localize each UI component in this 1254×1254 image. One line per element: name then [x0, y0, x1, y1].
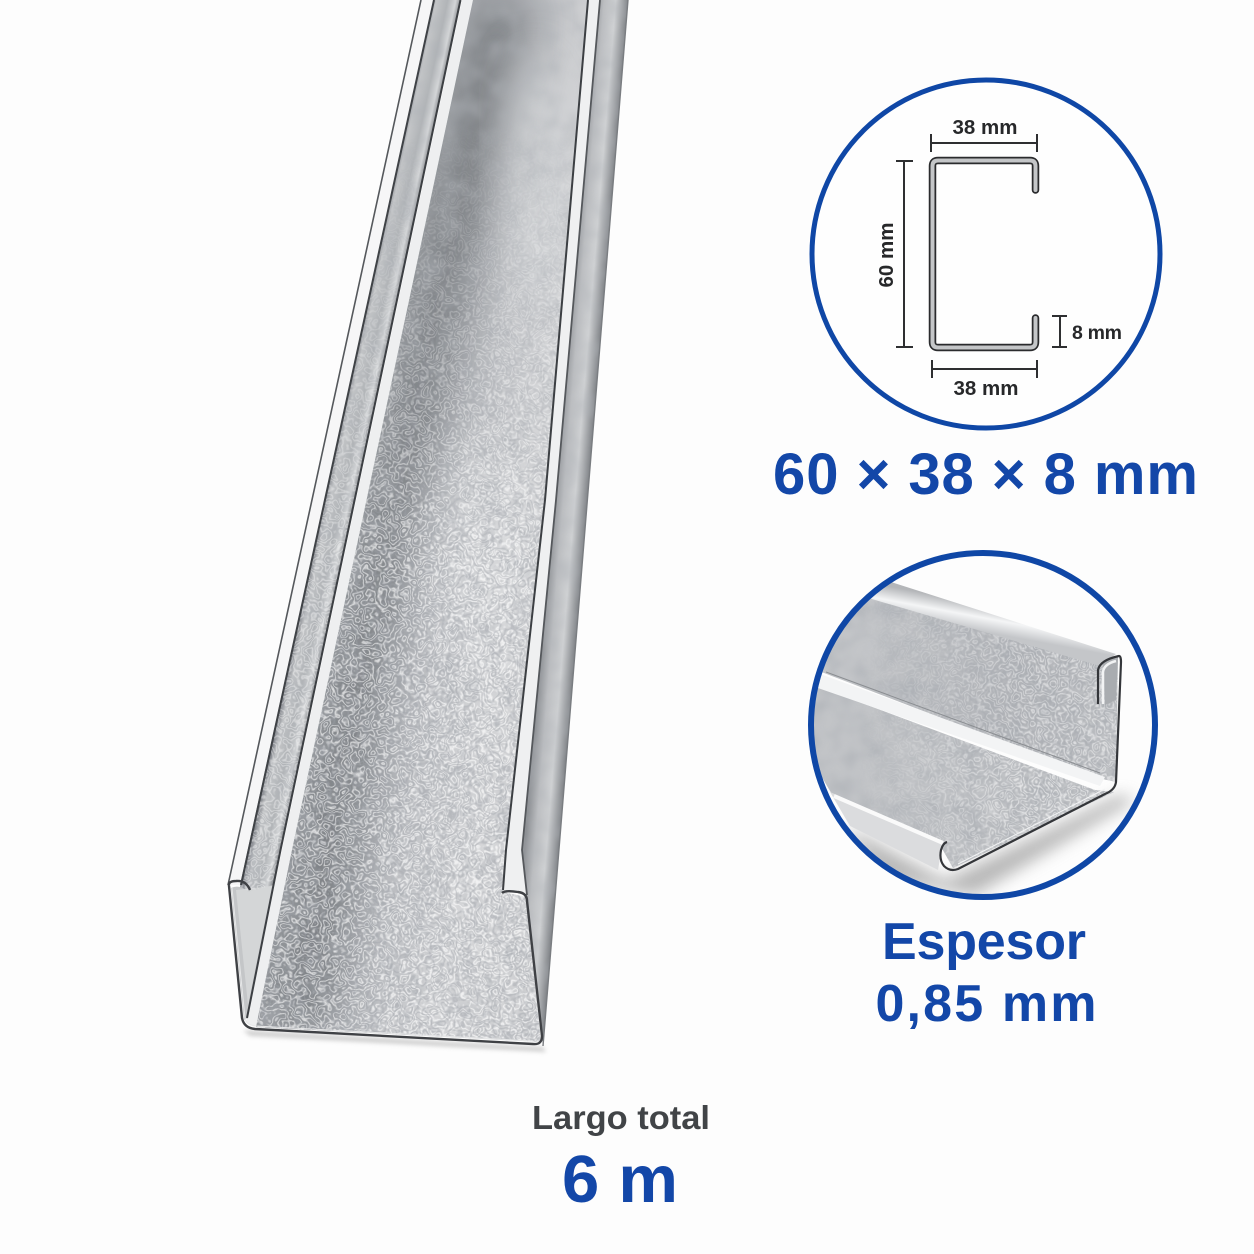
infographic canvas — [227, 0, 1194, 1202]
right outer face — [522, 0, 628, 1046]
length value: 6 m — [562, 1142, 678, 1217]
shadow — [845, 795, 1135, 895]
left wall — [240, 0, 460, 1018]
dimension: bottom width: 38 mm — [954, 377, 1018, 400]
right bend strip — [503, 0, 600, 893]
dimension: height — [875, 161, 913, 347]
front lip — [830, 792, 943, 870]
dimensions heading: 60 × 38 × 8 mm — [773, 442, 1198, 507]
circle: cross-section diagram — [812, 80, 1160, 428]
ground shadow — [243, 1030, 546, 1052]
left lip — [229, 0, 434, 885]
dimension: top width: 38 mm — [953, 116, 1017, 139]
label: total length — [532, 1099, 710, 1217]
dimension: height: 60 mm — [875, 223, 898, 287]
dimension: bottom width — [932, 360, 1037, 400]
ring — [811, 553, 1155, 897]
circle: thickness close-up — [808, 550, 1158, 900]
back wall — [822, 598, 1118, 782]
steel channel profile — [228, 0, 630, 1052]
caption: Largo total — [532, 1099, 710, 1136]
left bend strip — [246, 0, 473, 1027]
thickness heading: 0,85 mm — [876, 975, 1096, 1033]
floor — [240, 0, 600, 1050]
dimension: lip: 8 mm — [1072, 322, 1122, 344]
ring — [812, 80, 1160, 428]
top lip band — [865, 581, 1116, 666]
close-up photo — [814, 582, 1135, 894]
metal edge — [940, 656, 1121, 870]
white bend — [815, 674, 1105, 786]
dimension: top width — [931, 116, 1037, 152]
left end opening — [231, 885, 273, 1020]
C profile outline — [932, 160, 1036, 348]
floor — [800, 680, 1114, 868]
thickness heading — [876, 913, 1096, 1033]
thickness heading: Espesor — [882, 913, 1086, 971]
front cut edge — [229, 881, 542, 1044]
dimension: lip — [1052, 316, 1122, 347]
right lip slot — [1103, 657, 1118, 705]
